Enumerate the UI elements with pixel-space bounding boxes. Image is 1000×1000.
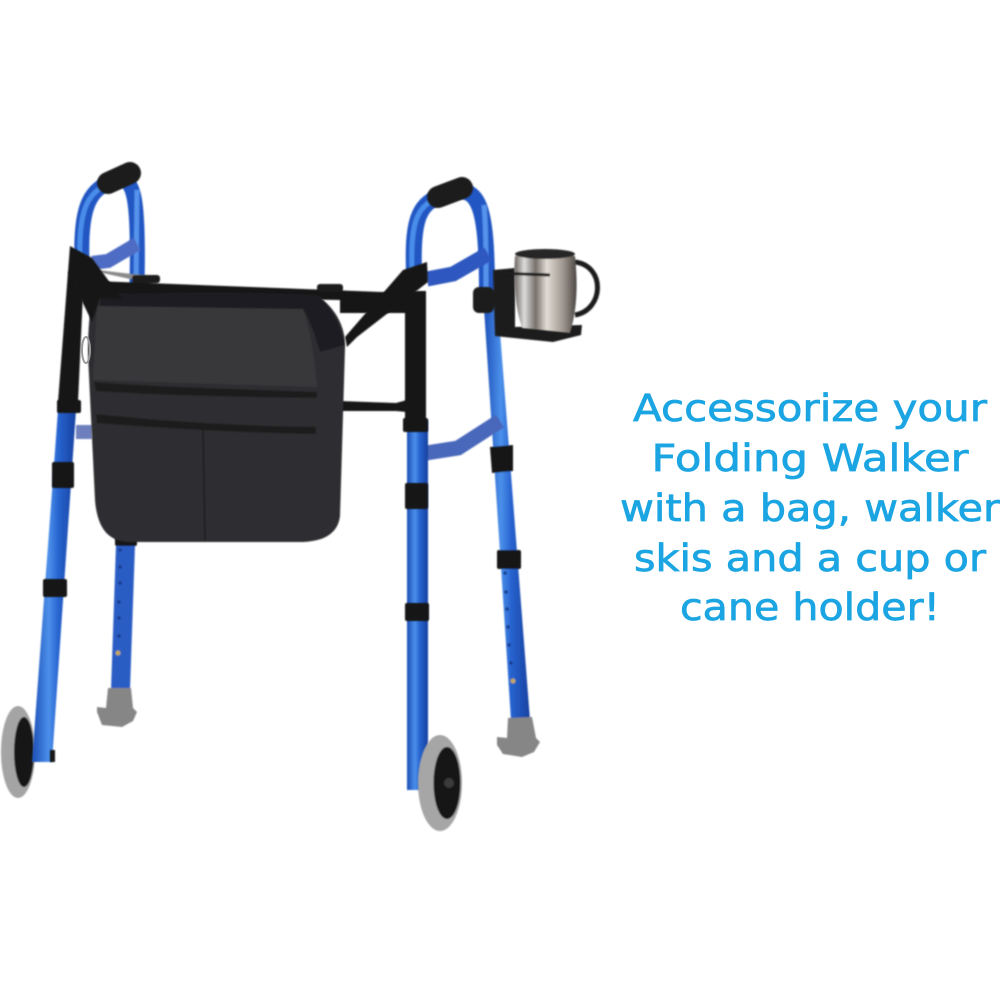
- bag: [88, 292, 345, 542]
- carabiner ring: [82, 337, 90, 363]
- caption text: skis and a cup or: [634, 537, 987, 580]
- lower side bar: [426, 421, 500, 453]
- left wheel: [1, 706, 35, 798]
- caption text: Folding Walker: [652, 437, 969, 480]
- far left leg: [97, 532, 137, 727]
- caption text: [620, 387, 1000, 629]
- right grip: [438, 188, 462, 197]
- far right leg: [483, 293, 540, 757]
- right frame arch: [412, 191, 487, 295]
- leg clamps: [43, 400, 429, 762]
- left side arm: [92, 244, 137, 263]
- right front leg: [407, 420, 428, 790]
- right front black post: [405, 291, 426, 421]
- walker with accessories: [1, 173, 598, 831]
- left frame arch: [80, 180, 137, 285]
- caption text: Accessorize your: [633, 387, 988, 430]
- right wheel: [418, 735, 462, 831]
- cup holder: [473, 268, 582, 342]
- left front black post: [58, 272, 84, 402]
- left grip: [108, 173, 130, 183]
- bag straps: [68, 246, 428, 347]
- stainless mug: [497, 249, 598, 333]
- caption text: cane holder!: [680, 586, 940, 629]
- caption text: with a bag, walker: [620, 487, 1000, 530]
- left front leg: [32, 410, 76, 762]
- folding cross bars: [76, 270, 407, 439]
- right side arm: [427, 254, 488, 279]
